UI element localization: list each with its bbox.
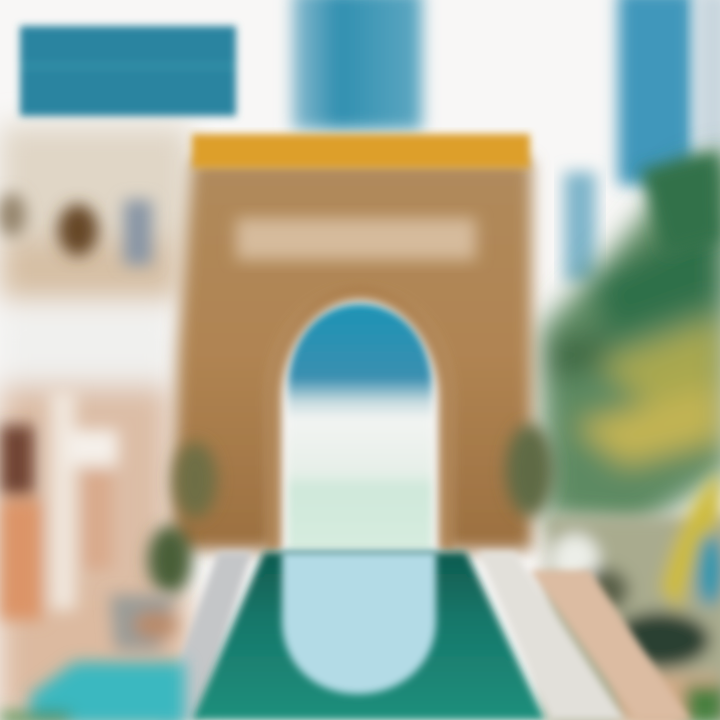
inscription panel <box>236 218 476 260</box>
left building windows and columns <box>0 193 152 620</box>
inner arch shadow <box>274 292 446 550</box>
gold top bar <box>192 134 530 168</box>
center tower <box>292 0 422 130</box>
arch opening <box>288 304 432 550</box>
palm base and lower foliage <box>545 150 720 720</box>
left building <box>0 125 190 720</box>
walkways <box>158 552 690 720</box>
shrubs beside arch <box>148 424 554 594</box>
arch reflection <box>282 552 436 694</box>
arch monument <box>172 134 532 550</box>
small distant tower <box>564 172 596 282</box>
right tower <box>618 0 694 185</box>
teal sign panel <box>20 26 236 116</box>
arch body <box>172 160 532 550</box>
palm tree <box>540 150 720 530</box>
far right pale tower <box>696 0 720 150</box>
reflecting pool <box>192 552 545 720</box>
left cyan pool <box>0 595 185 720</box>
